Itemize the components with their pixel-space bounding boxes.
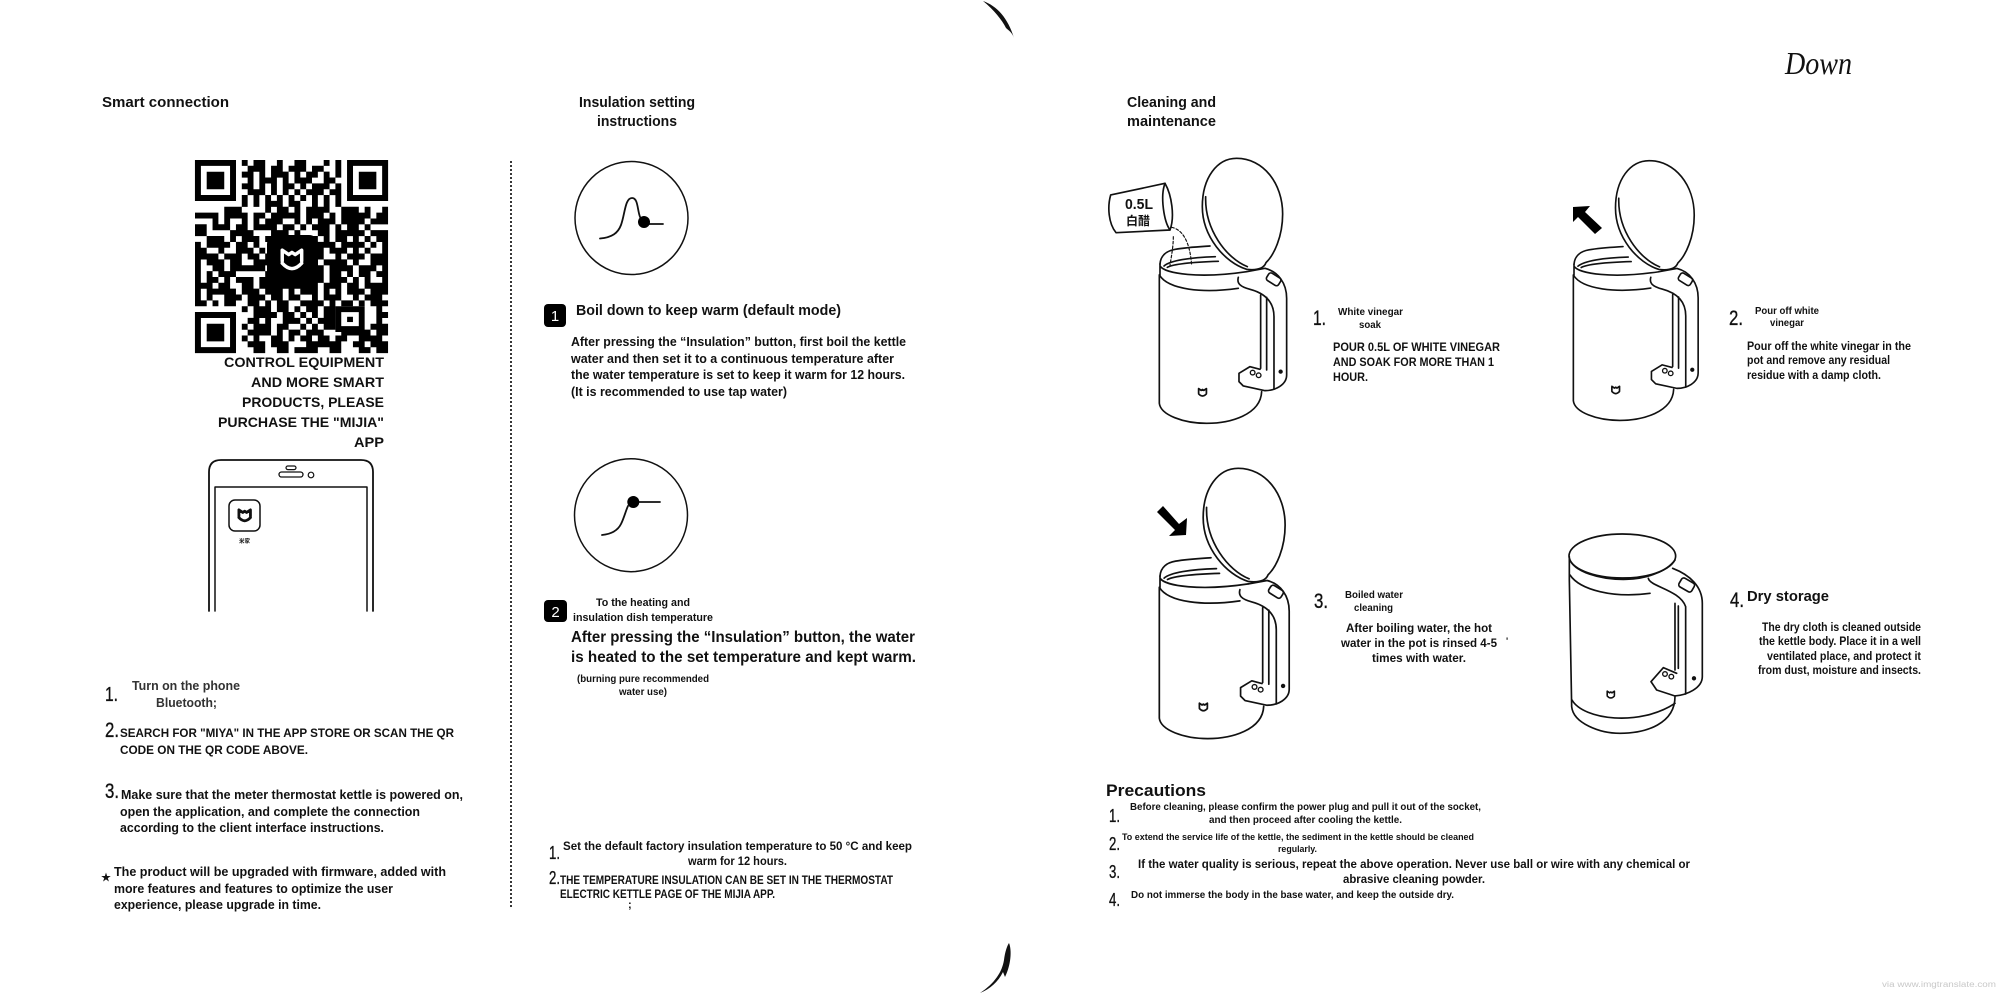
step 2: pour off vinegar: Pour off the white vinegar in the (1747, 341, 1911, 353)
note: firmware upgrade: experience, please upgrade in time. (114, 898, 321, 912)
precaution 3: If the water quality is serious, repeat the above operation. Never use ball or wire with any chemical or (1138, 857, 1690, 871)
heading: smart connection: Smart connection (102, 94, 229, 111)
text: boil down mode (570, 303, 906, 399)
text: control equipment note (218, 354, 384, 450)
step 2: search for app: 2. (105, 719, 119, 742)
heading: cleaning and maintenance: maintenance (1127, 114, 1216, 130)
text: control equipment note: PRODUCTS, PLEASE (242, 394, 384, 410)
heading: insulation setting instructions (579, 95, 695, 130)
fold mark: bottom (980, 943, 1011, 993)
step 2: search for app (105, 719, 454, 757)
precaution 4: Do not immerse the body in the base water, and keep the outside dry. (1131, 889, 1454, 901)
step 3: complete connection: Make sure that the meter thermostat kettle is powered on, (121, 788, 463, 802)
precaution 2: regularly. (1278, 844, 1317, 855)
panel: smart connection (101, 94, 463, 912)
step 2: pour off vinegar (1729, 306, 1911, 382)
notes: default temperature: warm for 12 hours. (687, 854, 787, 868)
illustration: pouring off vinegar (1573, 161, 1698, 420)
notes: default temperature (549, 839, 912, 911)
precaution 2: 2. (1109, 834, 1120, 854)
badge 2 (544, 600, 567, 622)
step 3: boiled water cleaning: water in the pot is rinsed 4-5 (1340, 636, 1497, 650)
step 1: turn on bluetooth (105, 679, 240, 710)
text: boil down mode: After pressing the “Insulation” button, first boil the kettle (571, 335, 906, 349)
precaution 4 (1109, 889, 1454, 910)
text: boil down mode: the water temperature is set to keep it warm for 12 hours. (571, 368, 905, 382)
precaution 3: 3. (1109, 862, 1120, 882)
icon: heat to set temperature curve (574, 459, 688, 572)
precaution 1: and then proceed after cooling the kettle. (1209, 814, 1402, 826)
step 3: boiled water cleaning: times with water. (1372, 651, 1466, 665)
text: control equipment note: CONTROL EQUIPMENT (224, 354, 384, 370)
step 1: white vinegar soak: White vinegar (1338, 307, 1403, 318)
note: firmware upgrade: more features and features to optimize the user (114, 882, 393, 896)
step 4: dry storage: from dust, moisture and insects. (1758, 665, 1921, 677)
arrow: up left (1573, 206, 1602, 234)
text: heating and insulation mode: is heated to the set temperature and kept warm. (571, 649, 916, 666)
step 4: dry storage: Dry storage (1747, 589, 1829, 605)
text: control equipment note: PURCHASE THE "MIJIA" (218, 414, 384, 430)
step 2: search for app: SEARCH FOR "MIYA" IN THE APP STORE OR SCAN THE QR (120, 726, 454, 740)
text: heating and insulation mode: After pressing the “Insulation” button, the water (571, 629, 915, 646)
icon: cat logo on QR code (267, 235, 318, 286)
step 1: white vinegar soak: soak (1359, 320, 1381, 331)
note: firmware upgrade: ★ (101, 873, 111, 884)
step 2: pour off vinegar: residue with a damp cloth. (1747, 370, 1881, 382)
step 2: pour off vinegar: vinegar (1770, 318, 1804, 329)
badge 1 (544, 304, 566, 327)
step 2: pour off vinegar: pot and remove any residual (1747, 355, 1890, 367)
notes: default temperature: THE TEMPERATURE INSULATION CAN BE SET IN THE THERMOSTAT (560, 875, 893, 887)
notes: default temperature: 1. (549, 843, 560, 863)
step 1: turn on bluetooth: 1. (105, 684, 118, 706)
note: firmware upgrade: The product will be upgraded with firmware, added with (114, 865, 446, 879)
handwritten note: Down: Down (1784, 45, 1852, 81)
step 3: boiled water cleaning: cleaning (1354, 603, 1393, 614)
step 4: dry storage: The dry cloth is cleaned outside (1762, 622, 1921, 634)
text: boil down mode: Boil down to keep warm (default mode) (576, 303, 841, 319)
step 1: white vinegar soak: 1. (1313, 307, 1326, 330)
badge 2: 2 (551, 604, 560, 621)
precaution 3: abrasive cleaning powder. (1343, 872, 1485, 886)
step 1: white vinegar soak: HOUR. (1333, 370, 1368, 384)
step 3: boiled water cleaning: Boiled water (1345, 590, 1403, 601)
heading: cleaning and maintenance: Cleaning and (1127, 95, 1216, 111)
text: heating and insulation mode: (burning pure recommended (577, 674, 709, 685)
step 1: turn on bluetooth: Turn on the phone (132, 679, 240, 693)
precautions block (1106, 781, 1690, 910)
precaution 2 (1109, 832, 1474, 855)
note: firmware upgrade (101, 865, 446, 912)
text: heating and insulation mode: water use) (618, 687, 667, 698)
precaution 2: To extend the service life of the kettle, the sediment in the kettle should be cleaned (1122, 832, 1474, 843)
step 4: dry storage: ventilated place, and protect it (1767, 651, 1921, 663)
step 1: white vinegar soak: POUR 0.5L OF WHITE VINEGAR (1333, 340, 1500, 354)
precaution 1: 1. (1109, 806, 1120, 826)
text: heating and insulation mode (571, 597, 916, 698)
badge 1: 1 (551, 308, 559, 325)
arrow: down right (1157, 506, 1187, 536)
step 1: white vinegar soak: AND SOAK FOR MORE THAN 1 (1333, 355, 1494, 369)
panel: cleaning and maintenance (1106, 95, 1921, 910)
watermark: via www.imgtranslate.com (1882, 980, 1996, 989)
notes: default temperature: ELECTRIC KETTLE PAGE OF THE MIJIA APP. (560, 889, 775, 901)
precaution 1 (1109, 801, 1481, 826)
illustration: pouring vinegar into kettle: 0.5L (1125, 196, 1153, 213)
precaution 4: 4. (1109, 890, 1120, 910)
step 3: boiled water cleaning: After boiling water, the hot (1346, 621, 1492, 635)
step 3: complete connection (105, 780, 463, 835)
panel: insulation setting (544, 95, 916, 911)
illustration: boiled water rinse (1157, 468, 1289, 739)
text: boil down mode: water and then set it to a continuous temperature after (570, 352, 894, 366)
step 3: complete connection: according to the client interface instructions. (120, 821, 384, 835)
precaution 3 (1109, 857, 1690, 886)
notes: default temperature: Set the default factory insulation temperature to 50 °C and keep (563, 839, 912, 853)
step 4: dry storage (1730, 589, 1921, 677)
text: boil down mode: (It is recommended to use tap water) (571, 385, 787, 399)
text: heating and insulation mode: insulation dish temperature (573, 612, 713, 624)
precaution 1: Before cleaning, please confirm the power plug and pull it out of the socket, (1130, 801, 1481, 813)
text: control equipment note: AND MORE SMART (251, 374, 384, 390)
illustration: closed kettle for dry storage (1569, 534, 1702, 733)
step 1: white vinegar soak (1313, 307, 1500, 384)
step 2: pour off vinegar: Pour off white (1755, 306, 1819, 317)
step 3: boiled water cleaning (1314, 590, 1508, 665)
step 3: complete connection: 3. (105, 780, 119, 803)
notes: default temperature: ; (628, 899, 632, 911)
heading: insulation setting instructions: Insulation setting (579, 95, 695, 111)
icon: phone with app (209, 460, 373, 611)
step 1: turn on bluetooth: Bluetooth; (156, 696, 217, 710)
heading: insulation setting instructions: instructions (597, 114, 677, 130)
step 2: search for app: CODE ON THE QR CODE ABOVE. (120, 743, 308, 757)
text: heating and insulation mode: To the heating and (596, 597, 690, 609)
step 2: pour off vinegar: 2. (1729, 307, 1743, 330)
heading: precautions: Precautions (1106, 781, 1206, 800)
step 4: dry storage: the kettle body. Place it in a well (1759, 636, 1921, 648)
step 3: boiled water cleaning: ' (1506, 636, 1508, 646)
illustration: pouring vinegar into kettle: 白醋 (1126, 213, 1150, 228)
notes: default temperature: 2. (549, 868, 560, 888)
fold mark: top (983, 1, 1014, 38)
heading: cleaning and maintenance (1127, 95, 1216, 130)
icon: boil then keep warm curve (575, 162, 688, 274)
step 3: boiled water cleaning: 3. (1314, 590, 1328, 613)
QR code (195, 163, 388, 350)
text: control equipment note: APP (354, 434, 384, 450)
illustration: pouring vinegar into kettle (1109, 158, 1287, 423)
icon: phone with app: 米家 (239, 537, 250, 545)
step 4: dry storage: 4. (1730, 589, 1744, 612)
step 3: complete connection: open the application, and complete the connection (120, 805, 420, 819)
